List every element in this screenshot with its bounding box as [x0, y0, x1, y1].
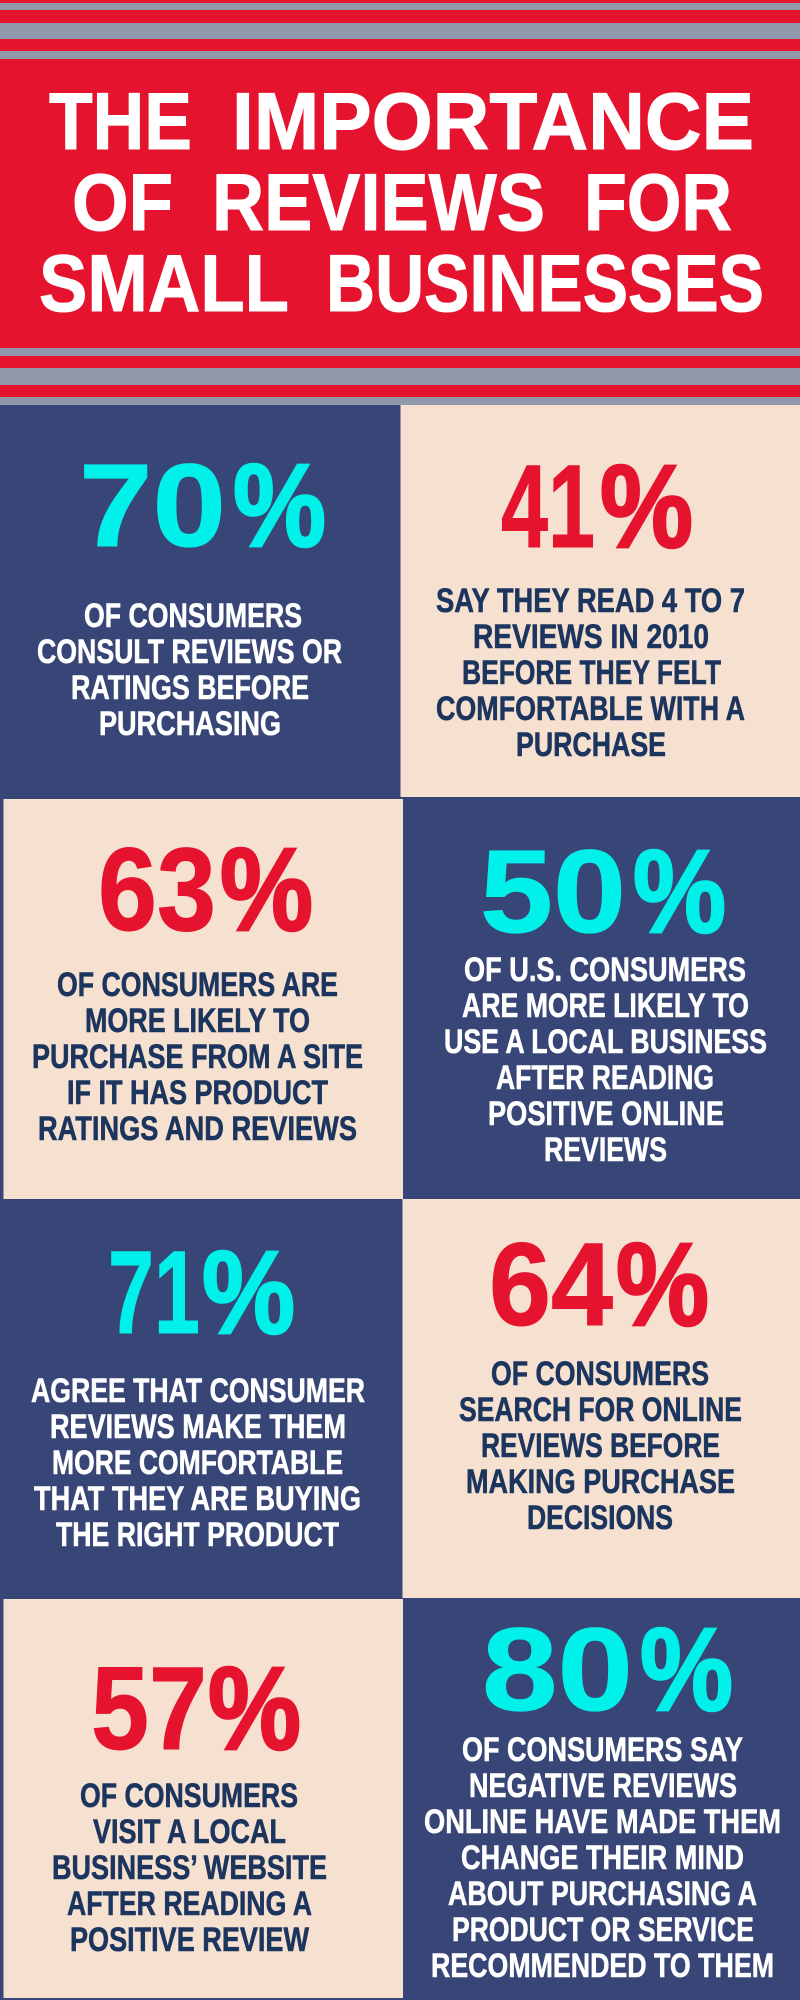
text: 41% description	[436, 582, 745, 764]
number: 70%: 70	[79, 440, 226, 572]
text: 63% description: PURCHASE FROM A SITE	[32, 1038, 363, 1076]
title: OF	[72, 158, 173, 248]
text: 70% description	[37, 597, 342, 743]
text: 63% description	[32, 966, 363, 1148]
text: 63% description: MORE LIKELY TO	[85, 1002, 310, 1040]
text: 41% description: PURCHASE	[516, 726, 666, 764]
text: 57% description: VISIT A LOCAL	[93, 1813, 286, 1851]
panel: 70% stat	[0, 405, 400, 799]
title: IMPORTANCE	[232, 77, 754, 167]
number: 41%: 41	[501, 441, 595, 573]
number: 41%: %	[600, 441, 693, 573]
panel: 50% stat	[404, 797, 800, 1199]
text: 50% description: POSITIVE ONLINE	[488, 1095, 724, 1133]
title: SMALL	[39, 239, 289, 329]
number: 57%: 57	[91, 1643, 207, 1775]
number: 50%: %	[633, 826, 726, 958]
text: 63% description: OF CONSUMERS ARE	[57, 966, 338, 1004]
number: 80%: %	[640, 1604, 733, 1736]
text: 71% description: REVIEWS MAKE THEM	[50, 1408, 346, 1446]
number: 50%: 50	[480, 826, 626, 958]
number: 57%: %	[208, 1643, 301, 1775]
panel: 57% stat	[4, 1599, 403, 1998]
number: 63%: 63	[98, 824, 216, 956]
text: 64% description: MAKING PURCHASE	[466, 1463, 735, 1501]
text: 41% description: REVIEWS IN 2010	[473, 618, 709, 656]
text: 70% description: OF CONSUMERS	[84, 597, 302, 635]
text: 64% description: OF CONSUMERS	[491, 1355, 709, 1393]
text: 50% description	[444, 951, 767, 1169]
text: 71% description: MORE COMFORTABLE	[52, 1444, 343, 1482]
text: 50% description: AFTER READING	[496, 1059, 714, 1097]
text: 57% description: AFTER READING A	[67, 1885, 312, 1923]
text: 71% description: THE RIGHT PRODUCT	[56, 1516, 339, 1554]
number: 63%: %	[220, 824, 313, 956]
number: 64%: %	[616, 1219, 709, 1351]
text: 57% description: BUSINESS’ WEBSITE	[52, 1849, 327, 1887]
panel: 80% stat	[404, 1599, 800, 2000]
text: 50% description: REVIEWS	[544, 1131, 667, 1169]
text: 63% description: IF IT HAS PRODUCT	[67, 1074, 328, 1112]
text: 80% description	[424, 1731, 781, 1985]
panel: title banner	[0, 0, 800, 405]
text: 71% description	[31, 1372, 365, 1554]
panel: 71% stat	[0, 1199, 402, 1598]
text: 63% description: RATINGS AND REVIEWS	[38, 1110, 357, 1148]
text: 64% description	[459, 1355, 742, 1537]
panel: 63% stat	[4, 799, 403, 1199]
text: 57% description: OF CONSUMERS	[80, 1777, 298, 1815]
number: 70%: %	[233, 440, 326, 572]
number: 71%: %	[202, 1227, 295, 1359]
text: 70% description: CONSULT REVIEWS OR	[37, 633, 342, 671]
text: 70% description: PURCHASING	[99, 705, 281, 743]
number: 71%: 71	[108, 1227, 200, 1359]
text: 41% description: BEFORE THEY FELT	[462, 654, 721, 692]
title: FOR	[584, 158, 732, 248]
text: 57% description	[52, 1777, 327, 1959]
text: 64% description: REVIEWS BEFORE	[481, 1427, 720, 1465]
text: 71% description: THAT THEY ARE BUYING	[34, 1480, 361, 1518]
text: 64% description: DECISIONS	[527, 1499, 673, 1537]
text: 57% description: POSITIVE REVIEW	[70, 1921, 309, 1959]
title: THE	[49, 77, 192, 167]
title: REVIEWS	[212, 158, 545, 248]
number: 64%: 64	[489, 1219, 613, 1351]
title	[39, 77, 764, 329]
panel: 64% stat	[402, 1199, 800, 1598]
text: 70% description: RATINGS BEFORE	[71, 669, 309, 707]
text: 71% description: AGREE THAT CONSUMER	[31, 1372, 365, 1410]
panel: 41% stat	[400, 405, 800, 797]
number: 80%: 80	[482, 1604, 633, 1736]
